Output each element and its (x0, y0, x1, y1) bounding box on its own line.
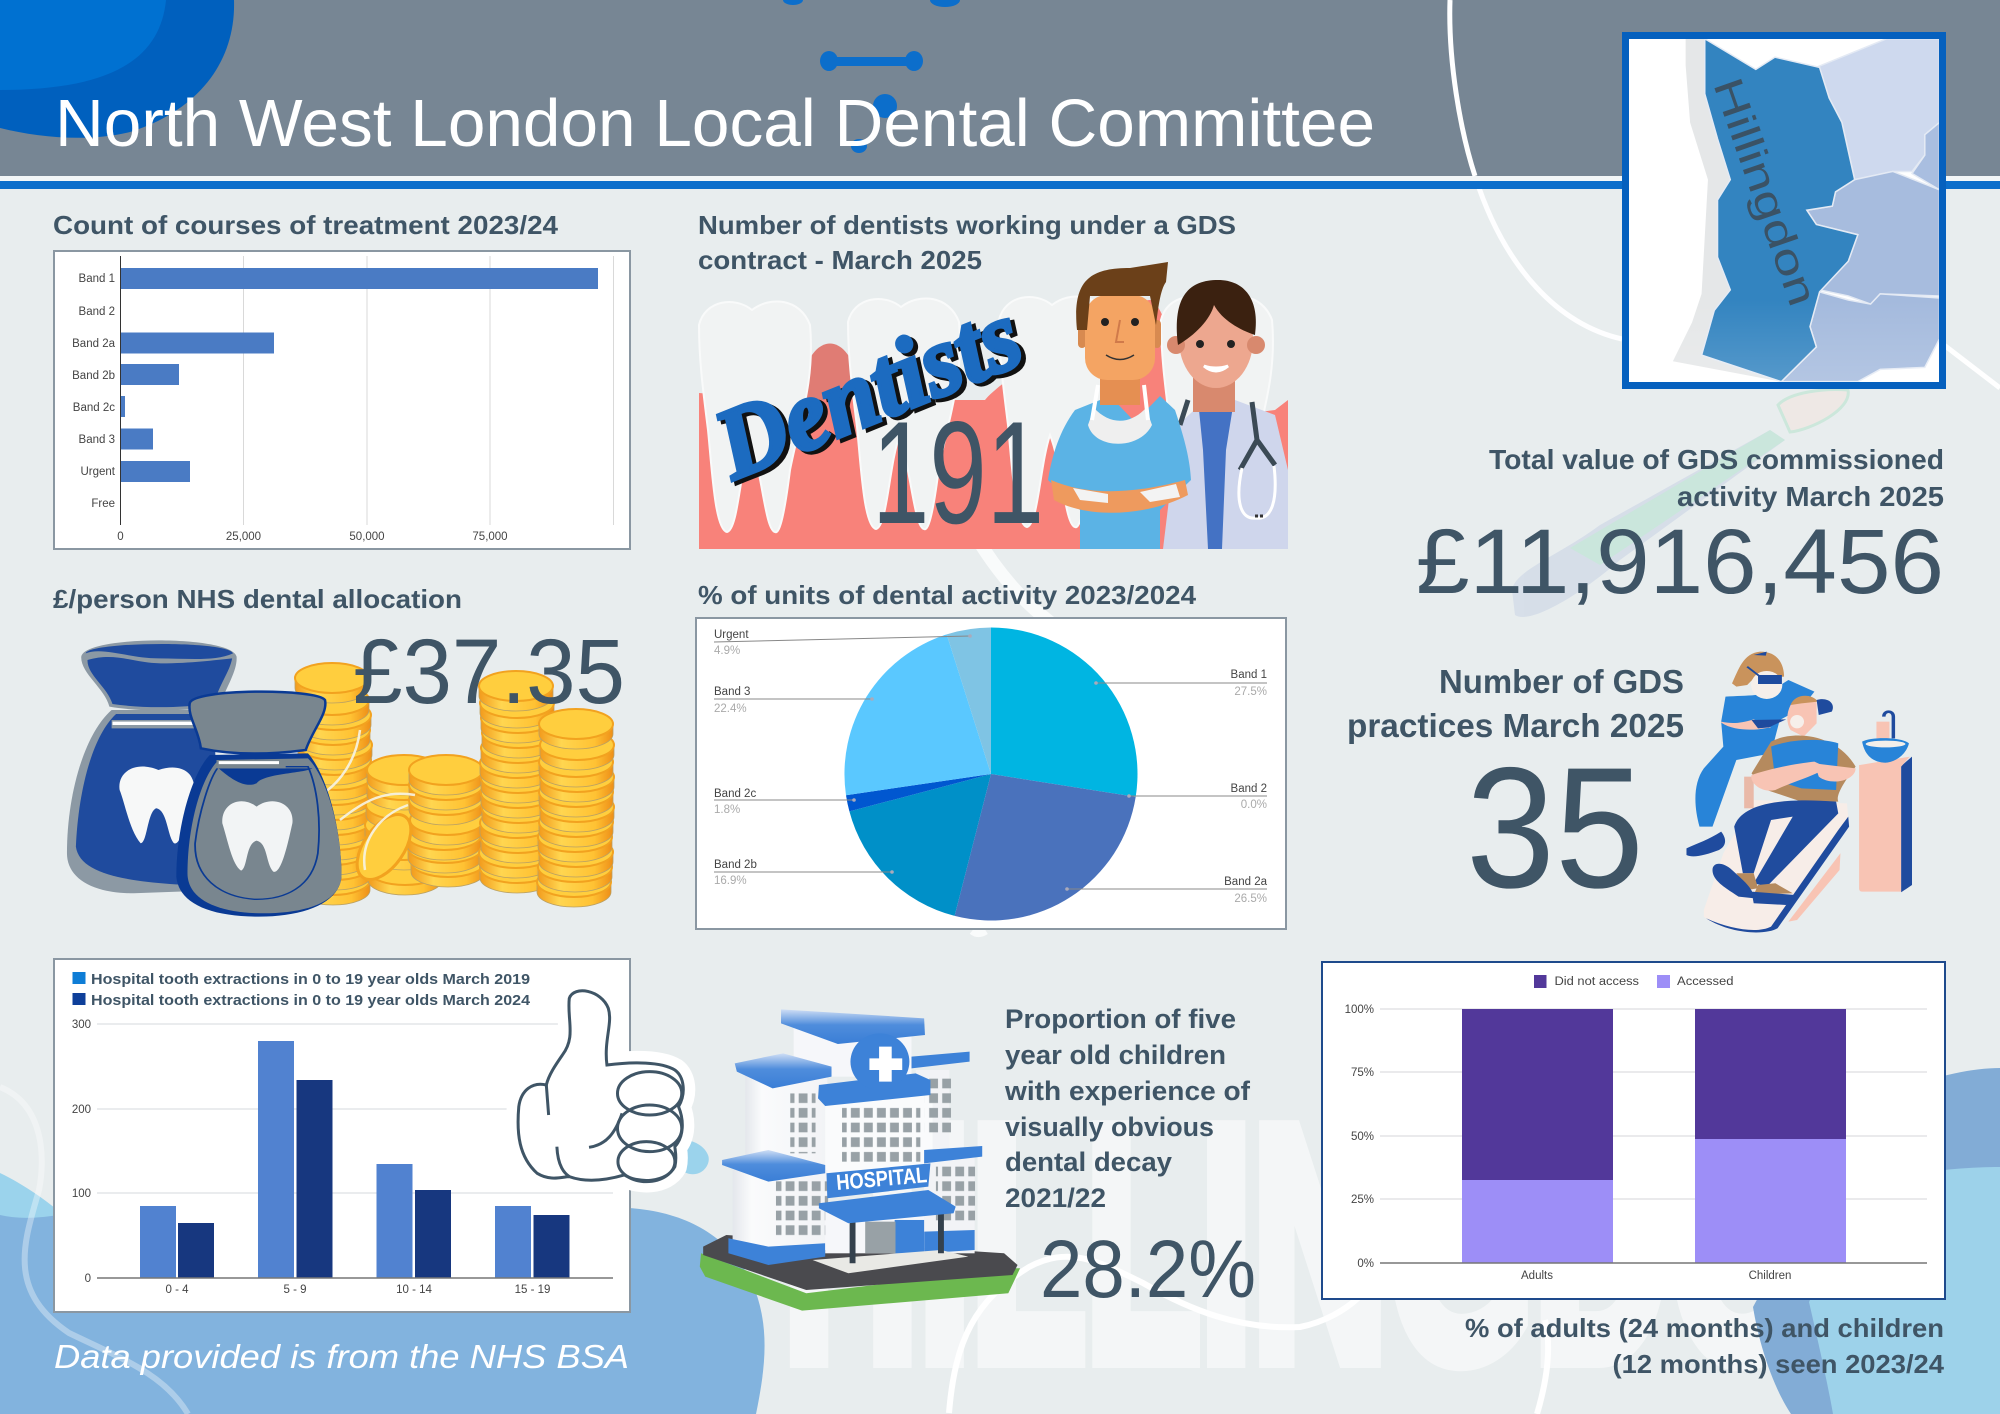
heading: Number of dentists working under a GDS (698, 210, 1236, 240)
map region: Hillingdon highlighted (1702, 39, 1858, 382)
axis labels: Adults (1521, 1270, 1553, 1282)
axis labels: 75% (1351, 1067, 1374, 1079)
pie chart (844, 628, 1138, 920)
background blobs: bottom right (1753, 1068, 2000, 1414)
bar labels: Band 3 (79, 434, 115, 446)
entrance (825, 1210, 924, 1253)
ground base (700, 1253, 1020, 1311)
bars (121, 268, 598, 482)
bar labels: Free (91, 498, 115, 510)
bar labels: Band 2 (79, 306, 115, 318)
axis labels: 300 (72, 1019, 91, 1031)
panel: GDS practices (1347, 652, 1912, 933)
sink unit (1859, 765, 1901, 892)
stool (1744, 777, 1754, 808)
pie labels left: 1.8% (714, 804, 740, 816)
panel: decay in five year olds (1004, 1004, 1256, 1315)
heading: £/person NHS dental allocation (53, 584, 462, 614)
columns (140, 1041, 570, 1278)
panel: adults and children seen (1322, 962, 1945, 1379)
pie labels left: Band 2b (714, 859, 757, 871)
caption: % of adults (24 months) and children (1465, 1313, 1944, 1343)
bar labels: Band 2c (73, 402, 115, 414)
header blob: dark blue (0, 0, 234, 138)
pie labels right: Band 2a (1224, 876, 1268, 888)
panel: number of dentists (698, 210, 1288, 554)
axis labels (72, 1019, 550, 1296)
heading: Number of GDS (1439, 663, 1684, 700)
map halo (1673, 39, 1781, 382)
dumbbell decoration (783, 0, 960, 153)
map region: middle (1807, 171, 1939, 304)
heading line two: contract - March 2025 (698, 245, 982, 275)
panel: hospital tooth extractions (54, 959, 683, 1312)
text block: with experience of (1004, 1076, 1251, 1106)
pie labels left (714, 629, 757, 887)
axis labels (1345, 1004, 1791, 1282)
toothbrush watermark (1512, 390, 1848, 617)
number: decay proportion: 28.2% (1040, 1224, 1256, 1315)
axis labels: 0 - 4 (165, 1284, 189, 1296)
axis labels: 10 - 14 (396, 1284, 433, 1296)
number: allocation: £37.35 (353, 621, 625, 723)
panel: units of dental activity (696, 580, 1286, 929)
cross sign (850, 1033, 909, 1090)
number: 191: 191 (872, 391, 1044, 554)
icon: floss container front (176, 692, 341, 917)
axis labels: 0 (85, 1273, 91, 1285)
bar labels: Band 1 (79, 273, 115, 285)
hospital sign: HOSPITAL (835, 1162, 928, 1195)
pie labels right: 26.5% (1234, 893, 1267, 905)
pie leader dots (852, 634, 1131, 891)
axis labels: 25% (1351, 1194, 1374, 1206)
bar labels: Band 2b (72, 370, 115, 382)
icon: male dentist (1048, 262, 1191, 549)
Dentists script lettering: Dentists (699, 278, 1036, 501)
axis labels: 100 (72, 1188, 91, 1200)
text block (1004, 1004, 1251, 1213)
windows (790, 1093, 816, 1153)
pie labels left: 22.4% (714, 703, 747, 715)
walls (794, 1027, 911, 1077)
dentist face (1751, 671, 1782, 699)
pie labels right (1224, 669, 1268, 905)
base bands (728, 1230, 975, 1265)
pie labels right: Band 2 (1231, 783, 1267, 795)
legend: Hospital tooth extractions in 0 to 19 year olds March 2024 (91, 992, 531, 1009)
legend: Accessed (1677, 976, 1734, 988)
pie chart frame (696, 618, 1286, 929)
pie labels left: Urgent (714, 629, 749, 641)
bar labels: Urgent (80, 466, 116, 478)
map frame (1626, 36, 1942, 386)
icon: female dentist (1163, 280, 1288, 549)
map: Hillingdon (1625, 35, 1943, 386)
heading line two: practices March 2025 (1347, 707, 1684, 744)
map region: east (1912, 122, 1939, 190)
axis labels: 50% (1351, 1131, 1374, 1143)
number: total value: £11,916,456 (1416, 511, 1944, 613)
caption line two: (12 months) seen 2023/24 (1612, 1349, 1945, 1379)
axis labels: 100% (1345, 1004, 1374, 1016)
legend (1534, 975, 1734, 988)
header curve (1450, 0, 1475, 176)
axis labels: 0 (117, 531, 124, 543)
pie labels left: Band 2c (714, 788, 756, 800)
title: North West London Local Dental Committee (55, 86, 1375, 161)
axis labels: 75,000 (472, 531, 508, 543)
axis labels: Children (1749, 1270, 1791, 1282)
bar labels: Band 2a (72, 338, 116, 350)
icon: dentist treating patient (1686, 652, 1912, 933)
Dentists script lettering: Dentists (703, 281, 1040, 503)
pie leader lines (714, 636, 1267, 889)
bars: adults (1462, 1009, 1613, 1263)
bar chart frame (54, 251, 630, 549)
heading: Total value of GDS commissioned (1489, 444, 1944, 475)
patient (1787, 696, 1817, 737)
icon: coin stacks (295, 663, 614, 907)
axis labels: 15 - 19 (515, 1284, 550, 1296)
pie labels right: Band 1 (1231, 669, 1267, 681)
icon: floss container back (67, 640, 237, 893)
axis labels: 25,000 (226, 531, 261, 543)
axis labels: 0% (1357, 1258, 1374, 1270)
data source note: Data provided is from the NHS BSA (54, 1338, 629, 1375)
axis labels: 200 (72, 1104, 91, 1116)
background blobs: bottom left (0, 1140, 765, 1414)
chair (1788, 853, 1840, 922)
panel: allocation per person (53, 584, 625, 917)
dentist forearm (1721, 719, 1771, 730)
axis labels: 50,000 (349, 531, 385, 543)
text block: year old children (1005, 1040, 1226, 1070)
legend (72, 971, 531, 1009)
shoe (1686, 832, 1725, 856)
icon: hospital building (700, 1009, 1020, 1311)
legend: Hospital tooth extractions in 0 to 19 year olds March 2019 (91, 971, 530, 988)
bar labels (72, 273, 116, 510)
heading: % of units of dental activity 2023/2024 (698, 580, 1197, 610)
pie labels left: Band 3 (714, 686, 750, 698)
map region: south (1781, 292, 1939, 382)
heading line two: activity March 2025 (1677, 481, 1944, 512)
text block: Proportion of five (1005, 1004, 1236, 1034)
heading: Count of courses of treatment 2023/24 (53, 210, 559, 240)
dentist hair (1732, 652, 1784, 687)
map label: Hillingdon (1705, 72, 1826, 312)
teeth and gums illustration (699, 296, 1288, 549)
dentist legs and torso (1695, 680, 1814, 827)
legend: Did not access (1554, 976, 1639, 988)
map region: north east (1816, 39, 1939, 180)
pie labels left: 16.9% (714, 875, 747, 887)
header band (0, 0, 2000, 189)
pie labels left: 4.9% (714, 645, 740, 657)
number: practices: 35 (1466, 732, 1644, 924)
roofs (781, 1009, 925, 1044)
text block: visually obvious (1005, 1112, 1214, 1142)
panel: courses of treatment (53, 210, 630, 549)
header blob: light blue (0, 0, 166, 90)
pie labels right: 27.5% (1234, 686, 1267, 698)
column chart frame (54, 959, 630, 1312)
panel: total value (1416, 444, 1944, 613)
stacked bar frame (1322, 962, 1945, 1299)
text block: dental decay (1005, 1147, 1172, 1177)
axis labels (117, 531, 508, 543)
pie labels right: 0.0% (1241, 799, 1267, 811)
bars: children (1695, 1009, 1846, 1263)
icon: thumbs up (518, 991, 683, 1182)
text block: 2021/22 (1005, 1183, 1106, 1213)
axis labels: 5 - 9 (283, 1284, 307, 1296)
map fade (1625, 300, 1943, 386)
